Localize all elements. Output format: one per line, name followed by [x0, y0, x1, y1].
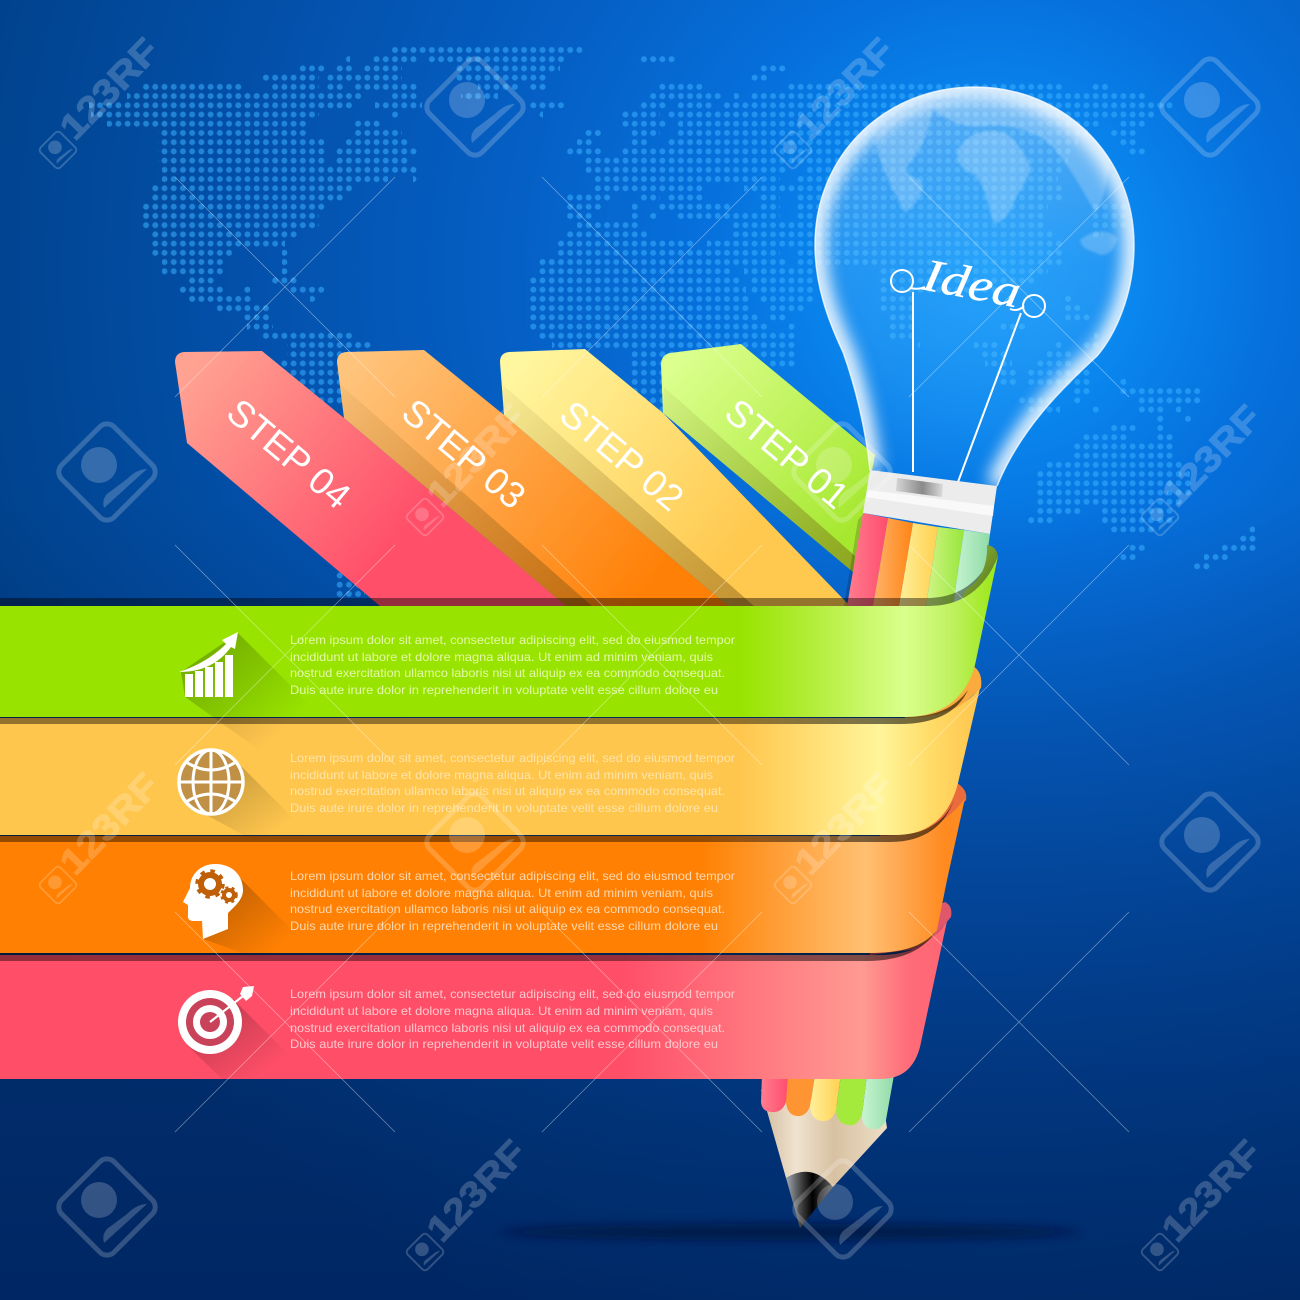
text block: red ribbon: nostrud exercitation ullamco laboris nisi ut aliquip ex ea commodo consequat.	[290, 1021, 725, 1035]
text block: green ribbon: Lorem ipsum dolor sit amet, consectetur adipiscing elit, sed do eiusmod tempor	[290, 633, 735, 647]
text block: yellow ribbon	[290, 751, 735, 815]
text block: yellow ribbon: Lorem ipsum dolor sit amet, consectetur adipiscing elit, sed do eiusmod tempor	[290, 751, 735, 765]
text block: yellow ribbon: Duis aute irure dolor in reprehenderit in voluptate velit esse cillum dolore eu	[290, 801, 718, 815]
text block: green ribbon: Duis aute irure dolor in reprehenderit in voluptate velit esse cillum dolore eu	[290, 683, 718, 697]
watermark logos: 123RF	[418, 397, 534, 515]
text block: orange ribbon: incididunt ut labore et dolore magna aliqua. Ut enim ad minim veniam, quis	[290, 886, 713, 900]
text block: green ribbon: incididunt ut labore et dolore magna aliqua. Ut enim ad minim veniam, quis	[290, 650, 713, 664]
icon: target with arrow	[178, 986, 302, 1079]
ribbon: yellow	[0, 666, 981, 842]
filament with the word Idea	[891, 249, 1045, 482]
arrow: step 02	[500, 349, 850, 606]
pencil tip	[761, 1075, 894, 1228]
text block: red ribbon: incididunt ut labore et dolore magna aliqua. Ut enim ad minim veniam, quis	[290, 1004, 713, 1018]
icon: globe	[179, 750, 306, 845]
text block: yellow ribbon: incididunt ut labore et dolore magna aliqua. Ut enim ad minim veniam, quis	[290, 768, 713, 782]
watermark logos: 123RF	[786, 765, 902, 883]
label: step 04: STEP 04	[219, 391, 358, 517]
label: step 03: STEP 03	[394, 391, 533, 517]
filament with the word Idea: Idea	[918, 249, 1025, 318]
watermark logos: 123RF	[51, 765, 167, 883]
watermark logos: 123RF	[1153, 1132, 1269, 1250]
text block: green ribbon: nostrud exercitation ullamco laboris nisi ut aliquip ex ea commodo consequat.	[290, 666, 725, 680]
ribbon: red	[0, 902, 951, 1079]
pencil collar	[863, 470, 997, 534]
icon: rising chart	[179, 632, 312, 752]
watermark logos: 123RF	[1153, 397, 1269, 515]
icon: head with gears	[183, 864, 302, 960]
shadow band above green ribbon and back fold	[0, 545, 998, 606]
text block: red ribbon: Duis aute irure dolor in reprehenderit in voluptate velit esse cillum dolore eu	[290, 1037, 718, 1051]
label: step 02: STEP 02	[552, 393, 691, 519]
ground shadow of pencil	[500, 1224, 1080, 1240]
text block: red ribbon	[290, 987, 735, 1051]
label: step 01: STEP 01	[717, 391, 856, 517]
ribbon: orange	[0, 783, 966, 961]
bulb inner rim glow	[815, 87, 1134, 486]
watermark crosshair lines	[175, 177, 1129, 1132]
dotted world map	[89, 50, 1256, 594]
light bulb	[815, 87, 1134, 486]
arrow: step 01	[661, 344, 875, 572]
text block: red ribbon: Lorem ipsum dolor sit amet, consectetur adipiscing elit, sed do eiusmod tempor	[290, 987, 735, 1001]
text block: orange ribbon: nostrud exercitation ullamco laboris nisi ut aliquip ex ea commodo consequat.	[290, 902, 725, 916]
watermark logos: 123RF	[786, 30, 902, 148]
pencil stripes below ribbon	[761, 1075, 894, 1129]
text block: orange ribbon: Duis aute irure dolor in reprehenderit in voluptate velit esse cillum dolore eu	[290, 919, 718, 933]
globe continents inside bulb	[876, 97, 1117, 255]
arrow: step 03	[337, 350, 728, 606]
ribbon: green	[0, 556, 998, 724]
pencil body stripes above ribbon	[844, 513, 990, 606]
text block: green ribbon	[290, 633, 735, 697]
arrow: step 04	[175, 351, 566, 606]
watermark logos: 123RF	[418, 1132, 534, 1250]
text block: yellow ribbon: nostrud exercitation ullamco laboris nisi ut aliquip ex ea commodo consequat.	[290, 784, 725, 798]
text block: orange ribbon: Lorem ipsum dolor sit amet, consectetur adipiscing elit, sed do eiusmod tempor	[290, 869, 735, 883]
watermark logos: 123RF	[51, 30, 167, 148]
text block: orange ribbon	[290, 869, 735, 933]
